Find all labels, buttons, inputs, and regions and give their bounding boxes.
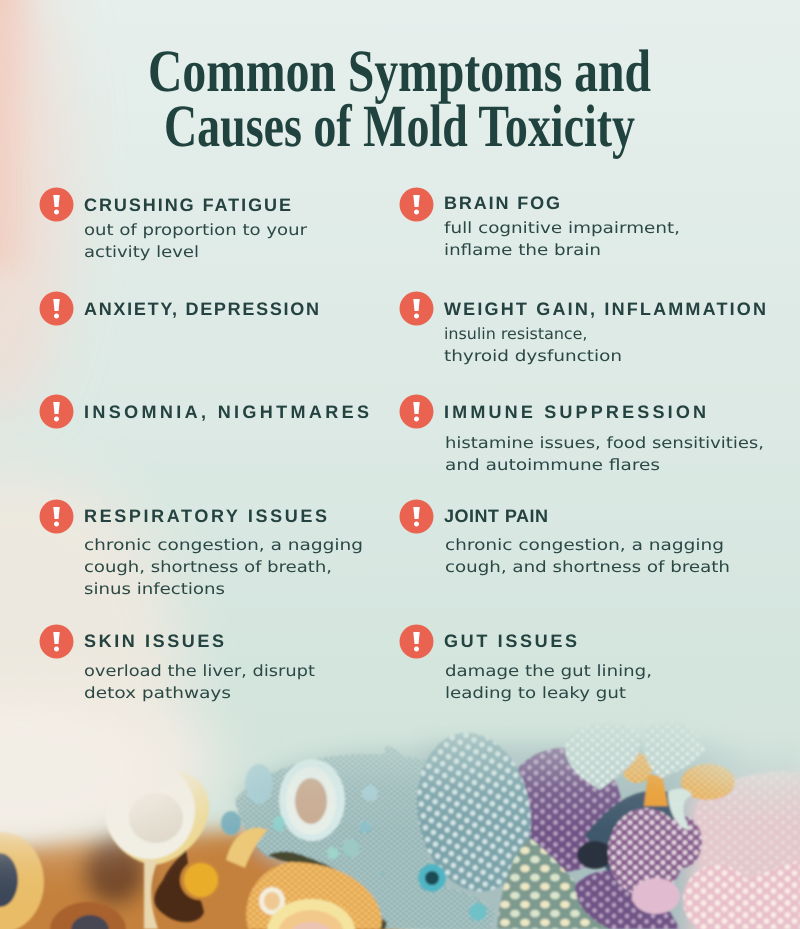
item: joint pain: cough, and shortness of breath [445, 558, 730, 576]
icon: alert [40, 394, 74, 428]
teal bubbled mass [374, 746, 402, 875]
item: immune suppression: IMMUNE SUPPRESSION [444, 402, 706, 422]
white spore blob [104, 763, 209, 929]
item: crushing fatigue: CRUSHING FATIGUE [84, 195, 291, 215]
item: respiratory issues: chronic congestion, a nagging [84, 536, 363, 554]
icon: alert [40, 500, 74, 534]
item: respiratory issues: RESPIRATORY ISSUES [84, 506, 327, 526]
item: brain fog: inflame the brain [444, 241, 601, 259]
purple ball [608, 808, 702, 914]
item: gut issues: GUT ISSUES [444, 631, 577, 651]
item: joint pain: chronic congestion, a nagging [445, 536, 724, 554]
item: respiratory issues: sinus infections [84, 580, 225, 598]
icon: alert [400, 500, 434, 534]
icon: alert [400, 394, 434, 428]
item: gut issues: leading to leaky gut [445, 684, 626, 702]
item: insomnia, nightmares [40, 394, 369, 428]
dark cavity [154, 850, 204, 922]
icon: alert [40, 188, 74, 222]
item: immune suppression: and autoimmune flares [445, 456, 660, 474]
item: weight gain, inflammation: WEIGHT GAIN, INFLAMMATION [444, 299, 766, 319]
item: skin issues: overload the liver, disrupt [84, 662, 315, 680]
title: Causes of Mold Toxicity [164, 93, 635, 159]
small teal spores [221, 764, 401, 875]
item: gut issues: damage the gut lining, [445, 662, 652, 680]
item: insomnia, nightmares: INSOMNIA, NIGHTMARES [84, 402, 369, 422]
icon: alert [40, 292, 74, 326]
lower purple mass [575, 871, 680, 929]
item: brain fog: full cognitive impairment, [444, 219, 680, 237]
blue bubbled mass [416, 732, 532, 892]
left lobed yellow rim and dark hole [0, 832, 44, 929]
lower dark ringed hole [50, 902, 126, 929]
item: brain fog [400, 188, 680, 259]
item: immune suppression [400, 394, 764, 474]
teal ring [418, 864, 446, 892]
item: weight gain, inflammation: thyroid dysfunction [444, 347, 622, 365]
blue ring spore [279, 759, 345, 841]
green yellow bubbled mass [497, 838, 612, 929]
item: gut issues [400, 624, 652, 702]
item: crushing fatigue [40, 188, 308, 261]
item: weight gain, inflammation [400, 292, 766, 365]
title [148, 38, 651, 159]
orange fungus [622, 753, 735, 830]
white flower clusters [565, 722, 705, 790]
blurred color ground [0, 740, 800, 929]
image: colorful mold macro texture [0, 722, 800, 929]
item: anxiety, depression: ANXIETY, DEPRESSION [84, 299, 319, 319]
item: respiratory issues [40, 500, 363, 598]
item: skin issues: detox pathways [84, 684, 231, 702]
orange sphere [180, 860, 220, 900]
purple bubbled mass [517, 747, 622, 873]
icon: alert [40, 624, 74, 658]
item: anxiety, depression [40, 292, 319, 326]
item: skin issues [40, 624, 315, 702]
item: skin issues: SKIN ISSUES [84, 631, 224, 651]
grey teal speckled ground [235, 754, 430, 929]
item: weight gain, inflammation: insulin resistance, [444, 325, 588, 343]
icon: alert [400, 624, 434, 658]
lower speckled mass [385, 884, 495, 929]
icon: alert [400, 292, 434, 326]
item: crushing fatigue: activity level [84, 243, 199, 261]
pink ball [735, 860, 800, 929]
item: brain fog: BRAIN FOG [444, 193, 560, 213]
icon: alert [400, 188, 434, 222]
yellow lobed blob [246, 862, 382, 929]
dark crack [268, 851, 395, 929]
title: Common Symptoms and [148, 38, 651, 104]
pink bubbled mass [694, 771, 800, 929]
soft fade over art [0, 685, 800, 835]
item: joint pain [400, 500, 730, 576]
dark gap [584, 790, 675, 872]
item: immune suppression: histamine issues, food sensitivities, [445, 434, 764, 452]
item: respiratory issues: cough, shortness of breath, [84, 558, 332, 576]
pale yellow lump [226, 828, 268, 868]
item: joint pain: JOINT PAIN [444, 506, 548, 526]
item: crushing fatigue: out of proportion to your [84, 221, 308, 239]
